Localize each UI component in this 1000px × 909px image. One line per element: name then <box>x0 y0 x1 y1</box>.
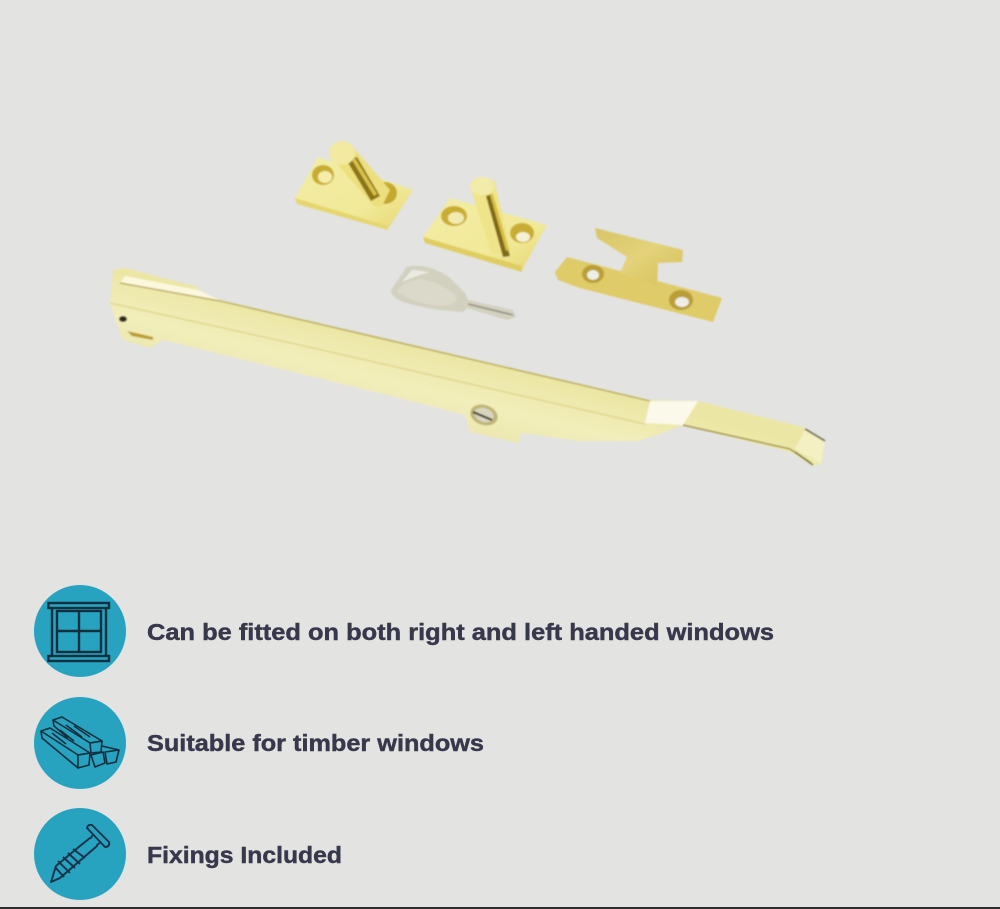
icon: window <box>34 585 126 677</box>
icon: screw <box>34 808 126 900</box>
keep bracket left <box>295 141 413 230</box>
feature text: fixings: Fixings Included <box>147 842 342 868</box>
key <box>391 266 516 320</box>
feature text: timber: Suitable for timber windows <box>147 730 484 756</box>
feature row: fits both hands <box>34 585 774 677</box>
feature row: fixings <box>34 808 342 900</box>
bottom edge line <box>0 907 1000 909</box>
latch keep plate <box>555 228 722 322</box>
feature text: fits both hands: Can be fitted on both right and left handed windows <box>147 619 774 645</box>
icon: timber beams <box>34 697 126 789</box>
feature row: timber <box>34 697 484 789</box>
product photo: window restrictor parts <box>110 141 825 466</box>
restrictor arm <box>110 268 825 466</box>
keep bracket right <box>423 177 547 272</box>
